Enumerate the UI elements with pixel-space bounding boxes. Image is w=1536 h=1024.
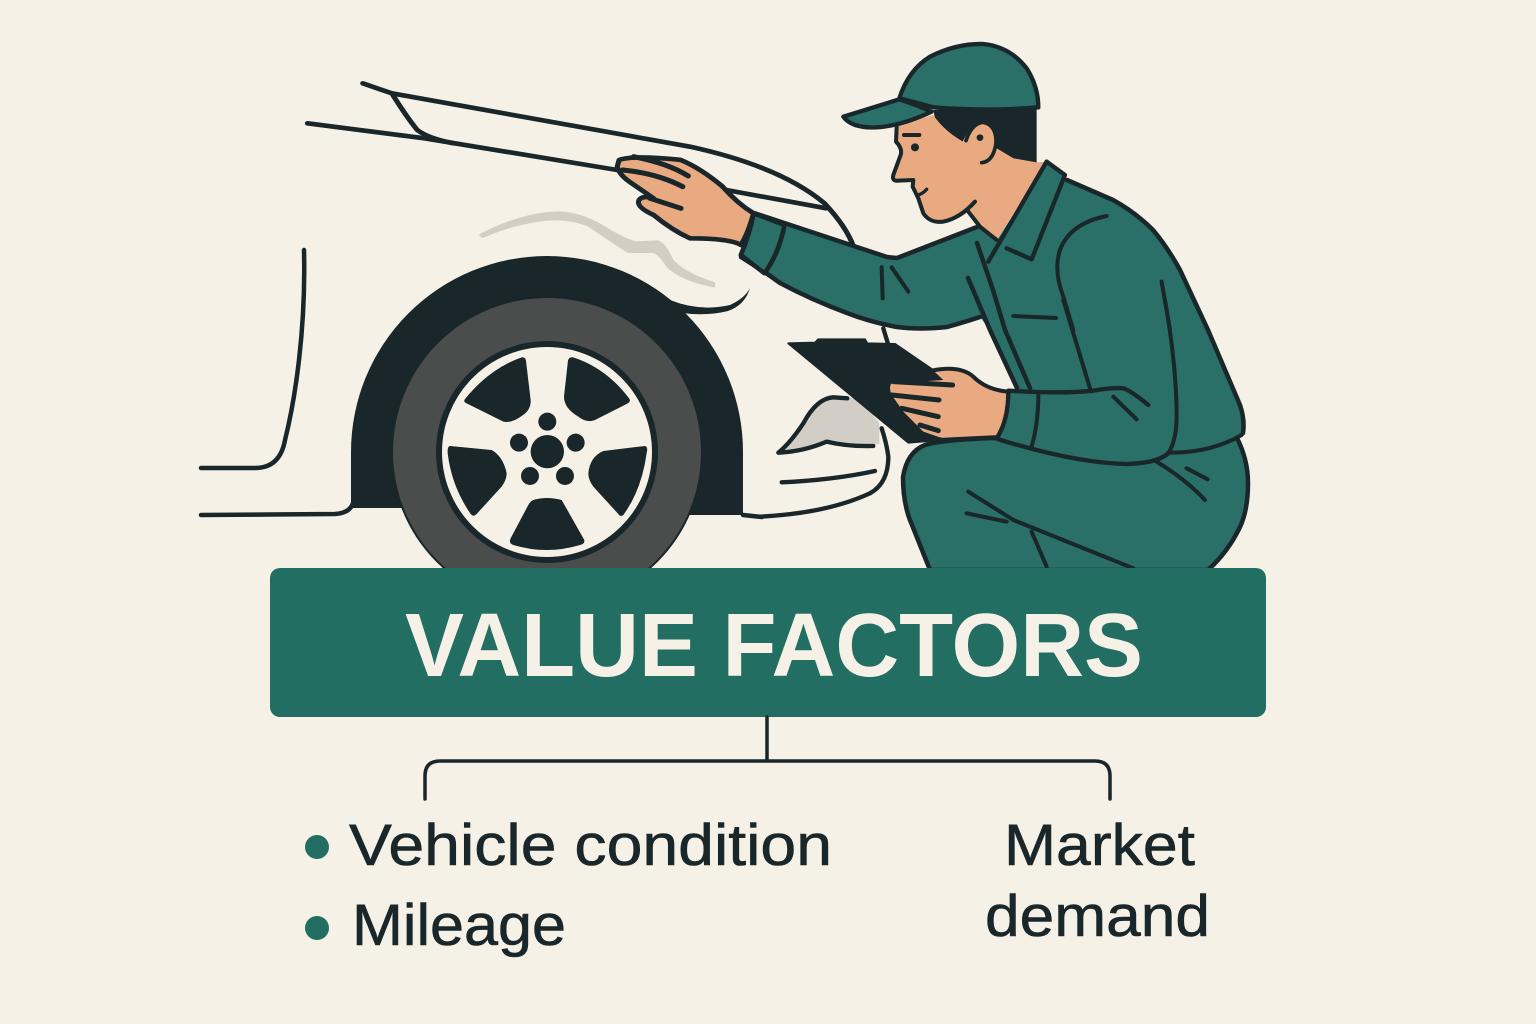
collar xyxy=(988,162,1065,262)
ear xyxy=(967,122,995,163)
neck and face xyxy=(843,44,1170,330)
label: vehicle condition: Vehicle condition xyxy=(349,813,832,878)
sleeve cuff xyxy=(741,213,784,273)
skin xyxy=(893,115,1047,240)
reaching hand xyxy=(617,157,784,273)
eye xyxy=(911,143,919,151)
reaching arm xyxy=(741,213,997,330)
right label: market demand: Market xyxy=(1004,813,1195,878)
left list xyxy=(305,813,832,958)
car body outline xyxy=(201,83,888,517)
hood lines xyxy=(307,83,854,247)
rim xyxy=(439,344,655,560)
connector bracket xyxy=(425,717,1110,799)
bullet: vehicle condition xyxy=(305,835,329,859)
forearm and cuff xyxy=(967,300,1242,568)
mechanic figure xyxy=(617,44,1248,570)
door edge line xyxy=(201,250,304,468)
right label: market demand: demand xyxy=(985,884,1210,949)
cap xyxy=(843,44,1038,127)
eyebrow xyxy=(904,129,919,141)
mouth xyxy=(918,189,927,195)
jacket torso xyxy=(968,162,1244,453)
hair xyxy=(933,107,1037,163)
fender arch xyxy=(351,256,743,515)
bullet: mileage xyxy=(305,916,329,940)
fender tail curve xyxy=(665,288,750,314)
label: mileage: Mileage xyxy=(352,893,566,958)
wheel and fender xyxy=(351,256,750,607)
bumper and headlight xyxy=(760,328,888,517)
jacket details xyxy=(1057,216,1107,330)
right label: market demand xyxy=(985,813,1210,949)
jacket front lines xyxy=(977,243,1030,388)
banner title: VALUE FACTORS xyxy=(405,596,1143,696)
spokes and lugs xyxy=(448,357,647,550)
dent scratch mark xyxy=(481,213,714,286)
clipboard and hand xyxy=(788,339,1008,443)
sill line xyxy=(201,503,353,515)
banner xyxy=(270,568,1266,717)
tyre xyxy=(392,297,702,607)
trousers xyxy=(903,438,1248,570)
